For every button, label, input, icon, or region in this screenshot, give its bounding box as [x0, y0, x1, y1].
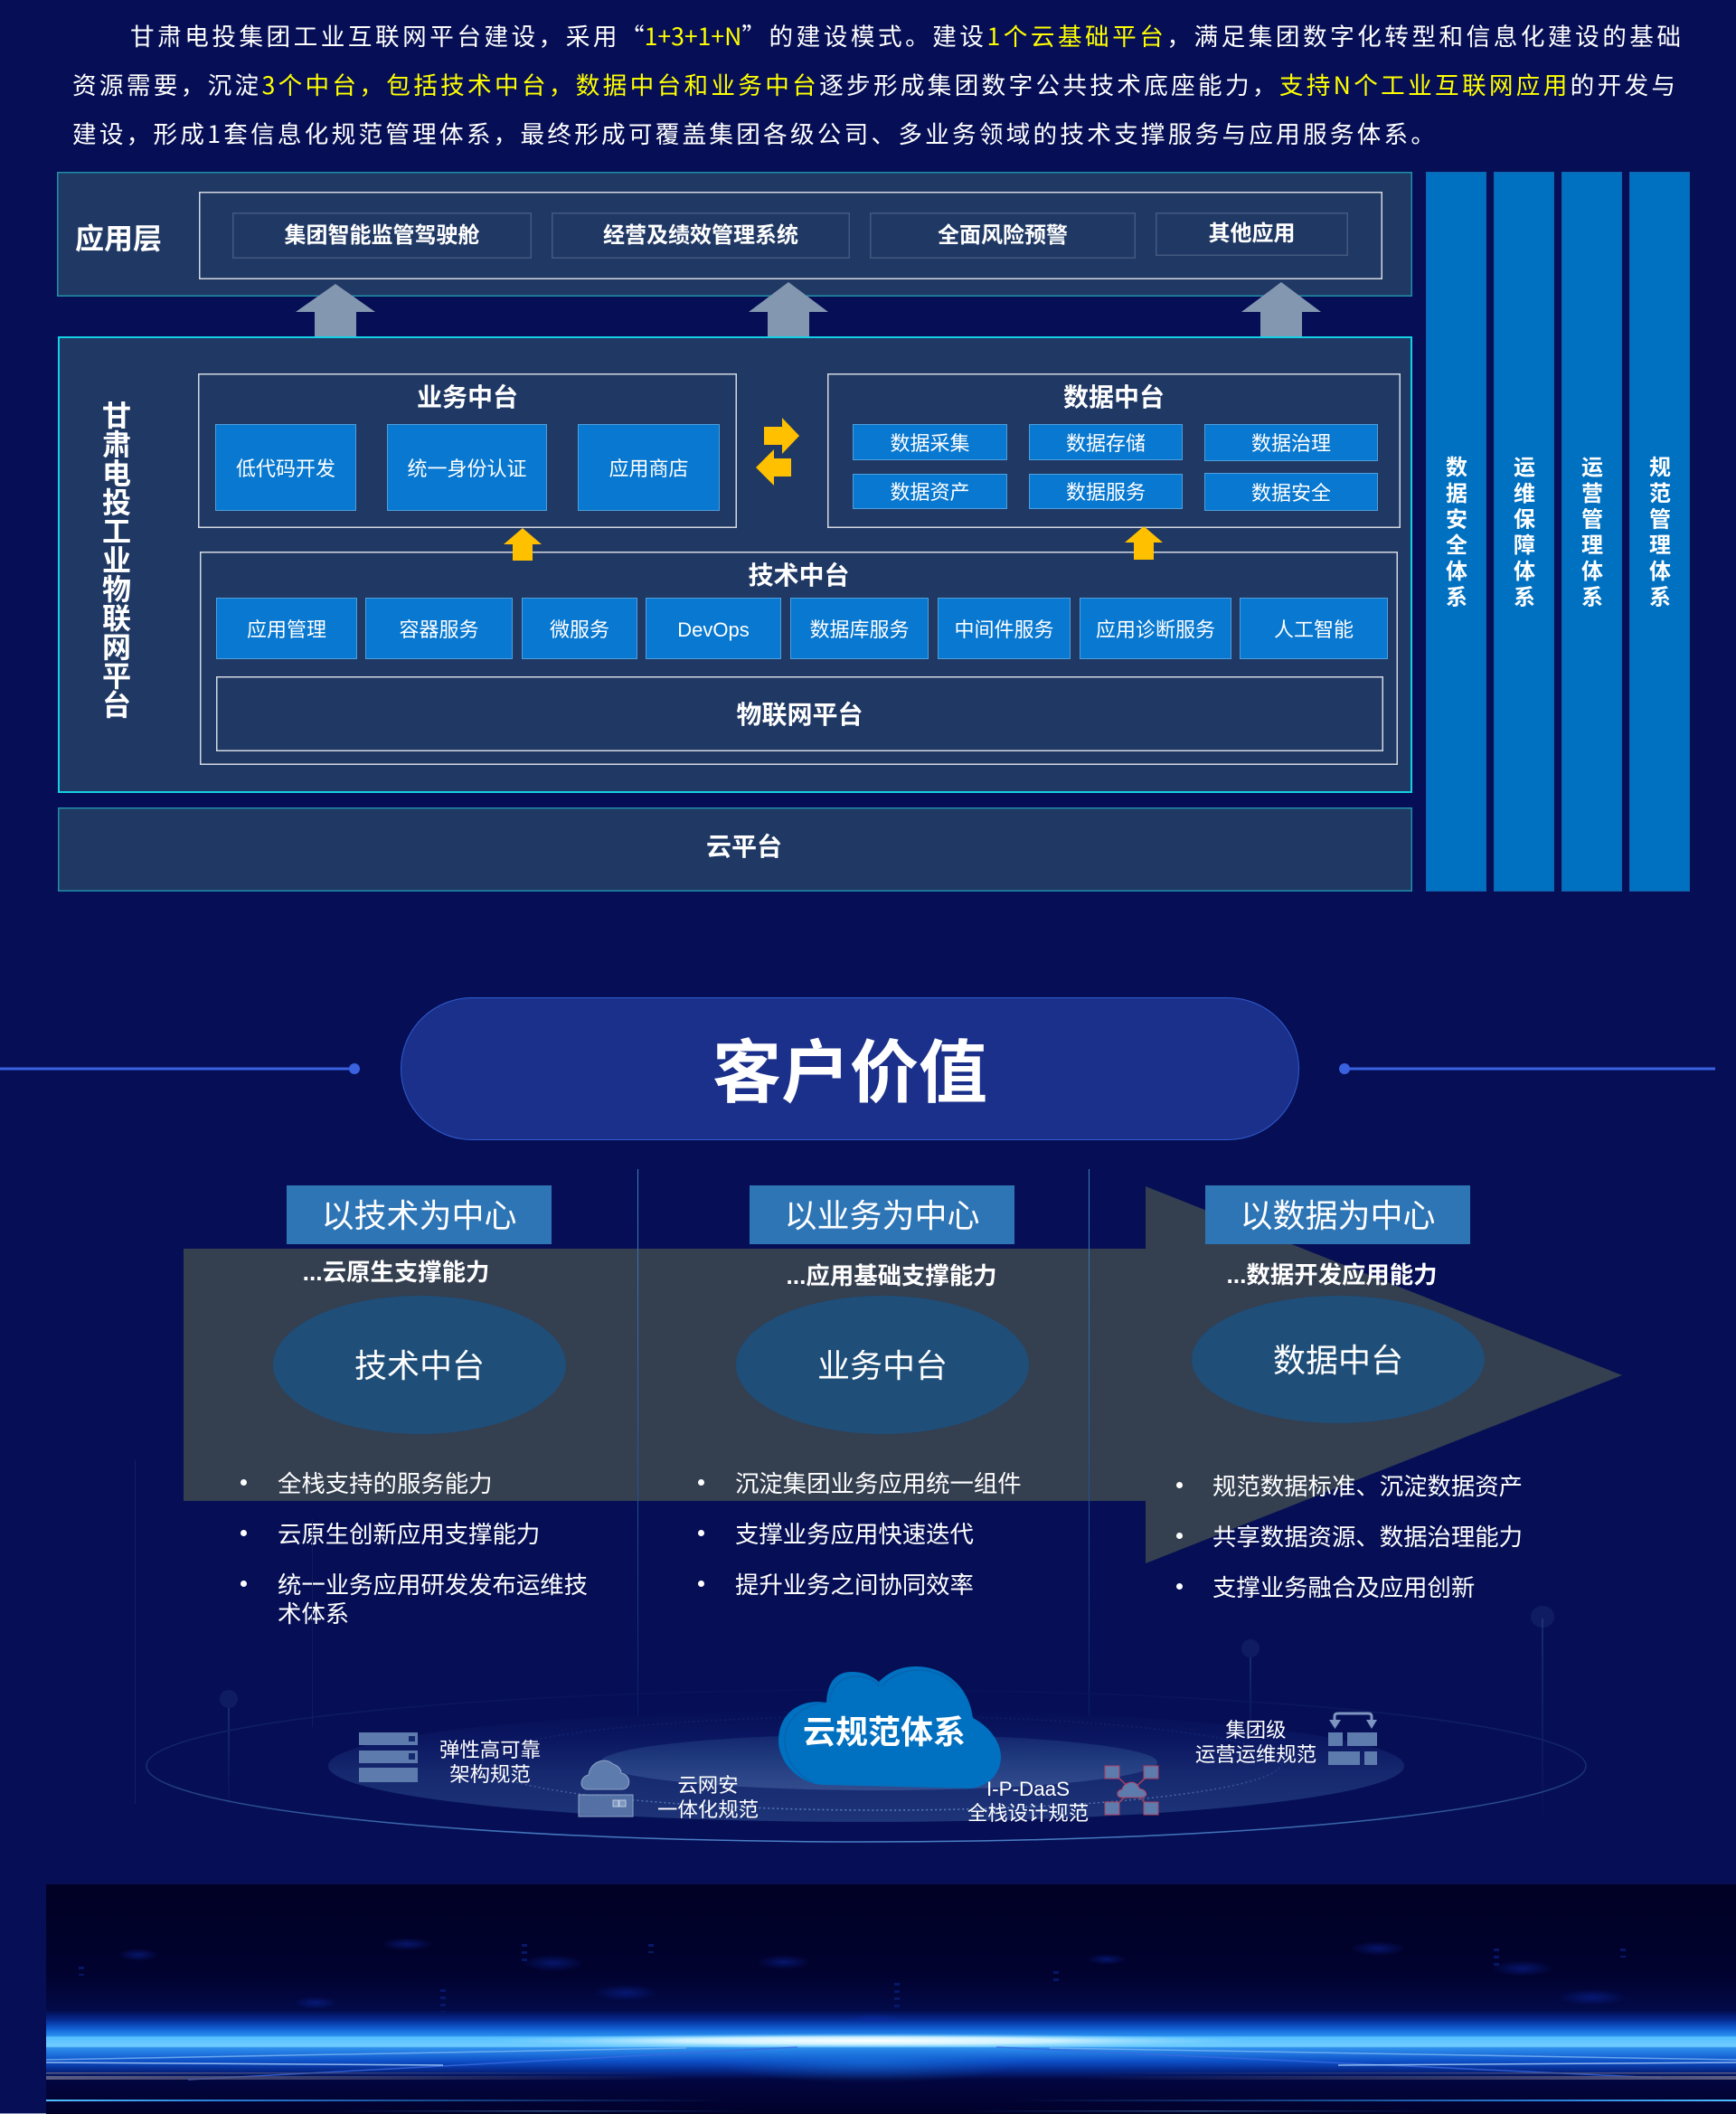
column: data centered — [1176, 1185, 1523, 1601]
icon: cloud and box — [579, 1760, 633, 1817]
faint vertical lines — [135, 1460, 313, 1804]
label: cloud network security: 云网安 — [677, 1774, 739, 1797]
arrow: two-way business/data — [756, 418, 799, 486]
bullets — [1176, 1473, 1523, 1601]
large background arrow — [184, 1186, 1622, 1563]
label: I-P-DaaS — [967, 1778, 1089, 1825]
label: operations — [1195, 1719, 1316, 1766]
heading: 数据中台 — [1063, 383, 1165, 411]
horizontal ground bands — [46, 2072, 1736, 2112]
divider right — [1089, 1169, 1090, 1730]
item: 微服务 — [550, 618, 609, 640]
intro text block — [72, 17, 1681, 150]
app: performance system — [552, 212, 850, 259]
item: 数据采集 — [890, 432, 969, 454]
heading — [287, 1185, 552, 1244]
heading: 以业务为中心 — [784, 1197, 980, 1234]
subtitle: ...数据开发应用能力 — [1226, 1261, 1438, 1288]
icon: server stack — [359, 1732, 418, 1782]
app: cockpit — [232, 212, 532, 259]
label: architecture: 弹性高可靠 — [439, 1739, 541, 1761]
side bar: standards management: 规范管理体系 — [1646, 456, 1669, 611]
item — [1029, 474, 1183, 509]
title decoration: right line — [1339, 1063, 1715, 1074]
perspective lines — [46, 2047, 1736, 2080]
bullets: 支撑业务融合及应用创新 — [1212, 1574, 1475, 1601]
arrow: up to application layer 3 — [1241, 282, 1321, 336]
bullets: 统一业务应用研发发布运维技 — [278, 1571, 588, 1599]
panel: business middle platform — [198, 373, 737, 528]
bullets: 沉淀集团业务应用统一组件 — [735, 1470, 1022, 1497]
item — [853, 424, 1007, 460]
item: 低代码开发 — [236, 458, 335, 479]
vertical title: 甘肃电投工业物联网平台 — [99, 401, 131, 719]
bullets: 规范数据标准、沉淀数据资产 — [1212, 1473, 1523, 1500]
side bar: standards management — [1629, 172, 1690, 892]
item: 容器服务 — [399, 618, 479, 640]
intro text block: 甘肃电投集团工业互联网平台建设，采用“1+3+1+N”的建设模式。建设1个云基础平台，满足集团数字化转型和信息化建设的基础 — [130, 17, 1681, 52]
footer: glowing horizon image — [46, 1884, 1736, 2114]
ellipse: 技术中台 — [354, 1347, 485, 1384]
arrow: tech to business — [504, 528, 542, 561]
side bar: operations assurance: 运维保障体系 — [1510, 456, 1533, 611]
ellipse — [1192, 1296, 1485, 1423]
app: performance system: 经营及绩效管理系统 — [603, 222, 798, 248]
bullets: 术体系 — [278, 1600, 349, 1628]
cloud title: 云规范体系 — [803, 1713, 966, 1751]
heading: 技术中台 — [748, 561, 850, 590]
item — [365, 598, 513, 659]
item: 数据安全 — [1251, 481, 1331, 505]
title: customer value: 客户价值 — [712, 1034, 987, 1112]
app: other: 其他应用 — [1208, 222, 1295, 246]
heading: application layer: 应用层 — [75, 222, 162, 255]
ellipse: 数据中台 — [1273, 1342, 1403, 1379]
item — [938, 598, 1071, 659]
panel: technology middle platform — [200, 552, 1398, 765]
item: 数据服务 — [1066, 481, 1146, 504]
heading: 以技术为中心 — [321, 1197, 517, 1234]
heading — [750, 1185, 1014, 1244]
item: 应用管理 — [247, 618, 326, 640]
label: cloud network security — [657, 1774, 759, 1821]
heading: 以数据为中心 — [1240, 1197, 1436, 1234]
intro text block: 建设，形成1套信息化规范管理体系，最终形成可覆盖集团各级公司、多业务领域的技术支撑服务与应用服务体系。 — [72, 115, 1438, 150]
bullets: 全栈支持的服务能力 — [278, 1470, 493, 1497]
item — [790, 598, 929, 659]
item — [1080, 598, 1231, 659]
item: 中间件服务 — [954, 618, 1054, 640]
item — [387, 424, 547, 511]
subtitle: ...云原生支撑能力 — [303, 1259, 489, 1286]
app: risk warning — [870, 212, 1136, 259]
item — [853, 474, 1007, 509]
item: 应用商店 — [609, 458, 689, 479]
column: technology centered — [241, 1185, 588, 1628]
label: architecture: 架构规范 — [449, 1763, 531, 1786]
item: DevOps — [677, 618, 750, 640]
ellipse: 业务中台 — [817, 1347, 948, 1384]
item — [1240, 598, 1388, 659]
item — [578, 424, 720, 511]
panel: IoT platform main — [58, 336, 1412, 793]
arrow: up to application layer 1 — [296, 284, 375, 336]
bullets — [241, 1470, 588, 1628]
item — [646, 598, 781, 659]
app: other — [1156, 212, 1348, 256]
side bar: operation management: 运营管理体系 — [1577, 456, 1602, 611]
icon: central cloud — [778, 1666, 1001, 1788]
label: operations: 运营运维规范 — [1195, 1743, 1316, 1766]
item — [216, 598, 357, 659]
side bar: operation management — [1561, 172, 1622, 892]
bright centre — [714, 2040, 1022, 2083]
item — [215, 424, 356, 511]
panel: cloud platform — [58, 807, 1412, 892]
heading: 业务中台 — [417, 383, 518, 411]
label: I-P-DaaS: 全栈设计规范 — [967, 1802, 1089, 1825]
poles — [220, 1606, 1554, 1817]
panel: application layer — [57, 172, 1412, 297]
bullets: 云原生创新应用支撑能力 — [278, 1521, 540, 1548]
panel: data middle platform — [827, 373, 1401, 528]
sky and horizon — [46, 1884, 1736, 2114]
item: 数据库服务 — [809, 618, 910, 640]
item: 数据存储 — [1066, 432, 1146, 454]
app: cockpit: 集团智能监管驾驶舱 — [284, 222, 479, 248]
platform rings — [146, 1690, 1586, 1842]
label: I-P-DaaS: I-P-DaaS — [986, 1778, 1070, 1800]
title: customer value — [401, 997, 1299, 1140]
label: cloud network security: 一体化规范 — [657, 1798, 759, 1821]
app: risk warning: 全面风险预警 — [938, 222, 1068, 248]
side bar: data security: 数据安全体系 — [1441, 456, 1467, 611]
light spots — [118, 1938, 1627, 2024]
bullets: 支撑业务应用快速迭代 — [735, 1521, 974, 1548]
label: architecture — [439, 1739, 541, 1786]
item: 数据治理 — [1251, 432, 1331, 455]
item: 数据资产 — [890, 481, 969, 504]
side bar: data security — [1426, 172, 1486, 892]
column: business centered — [698, 1185, 1029, 1599]
ellipse — [736, 1296, 1029, 1434]
item — [1204, 424, 1378, 461]
item — [1029, 424, 1183, 460]
item: 应用诊断服务 — [1096, 618, 1215, 640]
item — [522, 598, 637, 659]
title decoration: left line — [0, 1063, 360, 1074]
item — [1204, 473, 1378, 511]
arrow: tech to data — [1125, 526, 1163, 560]
divider left — [637, 1169, 638, 1730]
subtitle: ...应用基础支撑能力 — [786, 1262, 997, 1289]
application list frame — [199, 192, 1382, 279]
ellipse — [273, 1296, 566, 1434]
IoT platform bar — [216, 676, 1383, 751]
IoT platform bar: 物联网平台 — [736, 701, 863, 729]
bullets: 提升业务之间协同效率 — [735, 1571, 974, 1599]
data columns — [81, 1944, 1623, 2012]
bullets — [698, 1470, 1022, 1599]
label: operations: 集团级 — [1225, 1719, 1287, 1741]
intro text block: 资源需要，沉淀3个中台，包括技术中台，数据中台和业务中台逐步形成集团数字公共技术底座能力，支持N个工业互联网应用的开发与 — [72, 66, 1675, 101]
icon: operations blocks — [1328, 1713, 1377, 1765]
item: 人工智能 — [1274, 618, 1354, 640]
footer strip — [0, 2113, 46, 2114]
arrow: up to application layer 2 — [749, 282, 828, 336]
bullets: 共享数据资源、数据治理能力 — [1212, 1524, 1523, 1551]
icon: network cloud — [1105, 1766, 1158, 1815]
panel: cloud platform: 云平台 — [706, 832, 782, 861]
heading — [1205, 1185, 1470, 1244]
item: 统一身份认证 — [407, 458, 526, 479]
cloud standards platform scene — [135, 1460, 1587, 1843]
side bar: operations assurance — [1494, 172, 1554, 892]
